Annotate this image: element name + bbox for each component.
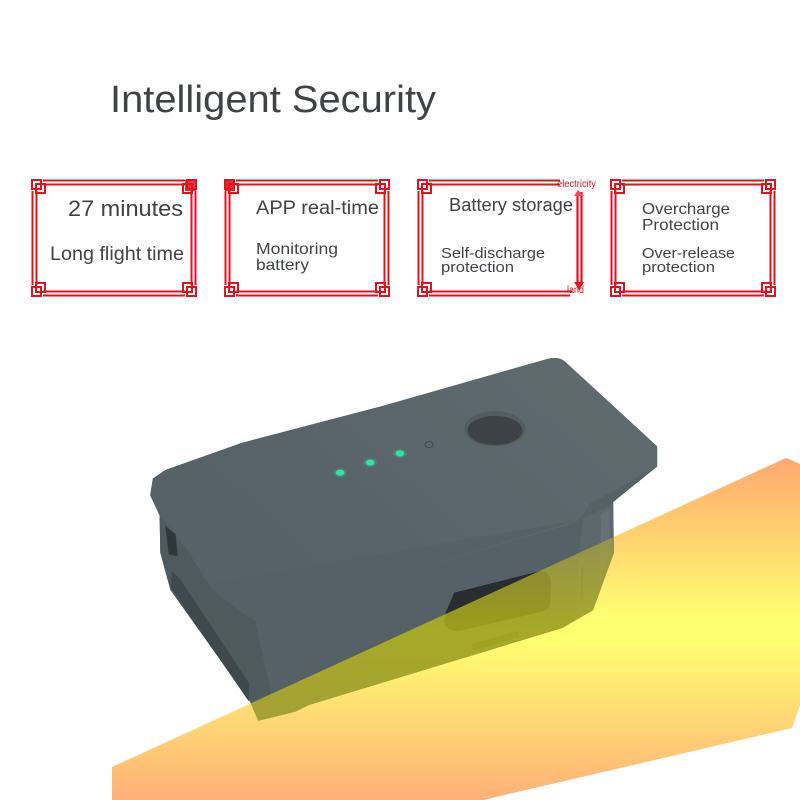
right side panel: [573, 504, 614, 620]
text: electricity: electricity: [557, 179, 596, 190]
panel: battery storage: [418, 179, 596, 296]
green led 1: [333, 468, 347, 477]
text: overcharge protection: Protection: [642, 217, 719, 234]
latch: [444, 571, 551, 631]
front face: [255, 523, 578, 705]
dark window on end face: [165, 526, 178, 556]
text: over-release protection: [642, 245, 735, 276]
title: Intelligent Security: [110, 79, 436, 121]
indicator ring: [425, 442, 433, 448]
yellow gradient band: [112, 458, 800, 800]
text: battery storage: Battery storage: [449, 195, 573, 215]
frame with broken right side: [418, 180, 584, 296]
panel: app monitoring: [225, 180, 389, 296]
text: overcharge protection: [642, 201, 730, 234]
button: [464, 411, 525, 446]
text: monitoring battery: battery: [256, 257, 309, 274]
text: monitoring battery: Monitoring: [256, 241, 338, 258]
green led 2: [363, 458, 377, 467]
panel: long flight time: [32, 180, 196, 296]
text: over-release protection: Over-release: [642, 245, 735, 262]
panel: overcharge protection: [611, 180, 775, 296]
corner mark: red blotch: [225, 180, 235, 191]
front notch: [471, 631, 519, 651]
text: app real-time: APP real-time: [256, 197, 379, 219]
battery body: [150, 358, 657, 721]
left end face: [160, 516, 271, 702]
text: overcharge protection: Overcharge: [642, 201, 730, 218]
left rail: [171, 571, 249, 702]
corner mark: red blotch: [185, 180, 196, 191]
yellow overlay on battery: [250, 537, 614, 721]
text: self-discharge protection: Self-discharge: [441, 245, 545, 262]
top shell: [150, 358, 657, 617]
text: 27 minutes: 27 minutes: [68, 196, 183, 221]
text: over-release protection: protection: [642, 259, 715, 276]
green led 3: [393, 449, 407, 458]
text: monitoring battery: [256, 241, 338, 274]
text: self-discharge protection: protection: [441, 259, 514, 276]
text: long flight time: Long flight time: [50, 244, 184, 265]
text: land: land: [567, 285, 584, 296]
text: self-discharge protection: [441, 245, 545, 276]
battery: [150, 358, 657, 721]
